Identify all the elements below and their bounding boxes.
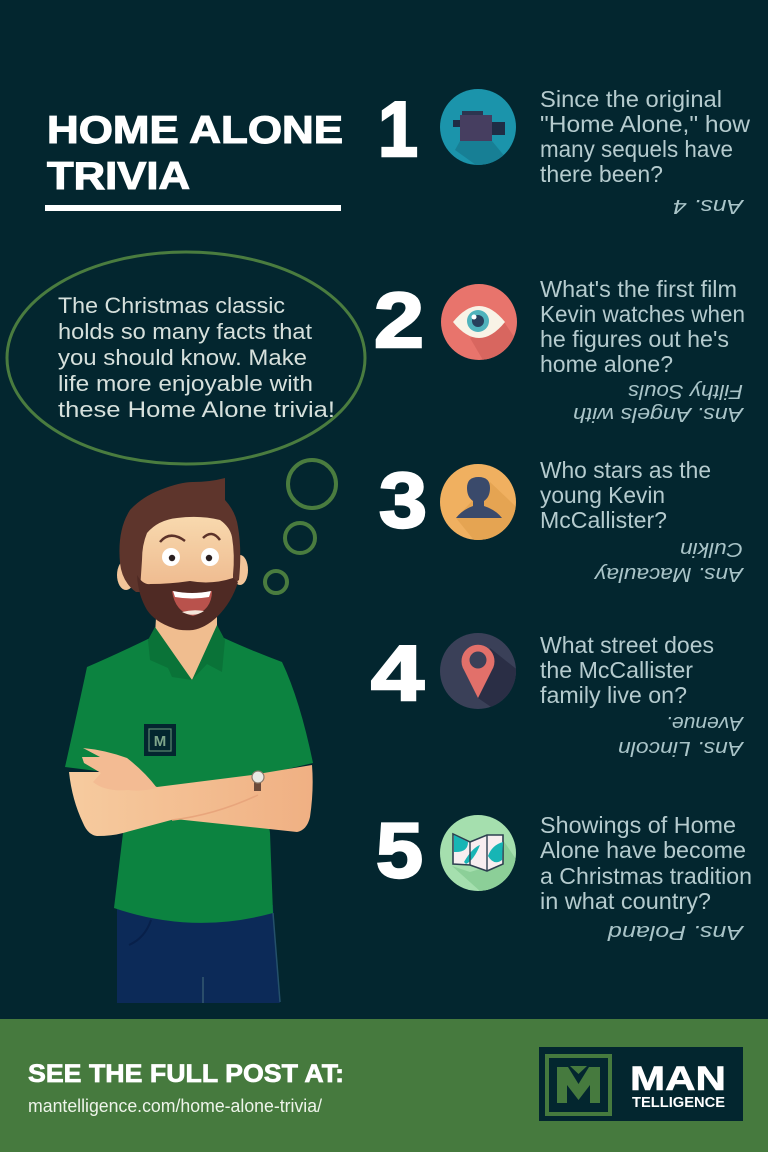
eyebrows [160, 534, 220, 542]
item 4 [371, 629, 744, 759]
footer url: mantelligence.com/home-alone-trivia/ [28, 1096, 322, 1116]
question 2: What's the first film [540, 276, 737, 302]
answer 5: Ans. Poland [607, 921, 744, 943]
face [140, 517, 234, 590]
footer [0, 1019, 768, 1152]
number 2: 2 [374, 276, 424, 364]
question 2: Kevin watches when [540, 301, 745, 327]
question 2: home alone? [540, 351, 673, 377]
icon: eye [441, 284, 517, 360]
crossed arms [69, 765, 313, 836]
question 1 [540, 86, 750, 187]
question 5: a Christmas tradition [540, 863, 752, 889]
number 5: 5 [376, 806, 423, 894]
number 1: 1 [378, 85, 418, 173]
answer 4 [618, 712, 744, 759]
arm crease [172, 795, 258, 820]
number 4: 4 [371, 629, 424, 717]
eyes [162, 548, 219, 566]
logo [539, 1047, 743, 1121]
thought bubble [7, 252, 365, 593]
question 4: family live on? [540, 682, 687, 708]
watch [252, 771, 264, 791]
question 2: he figures out he's [540, 326, 729, 352]
question 3 [540, 457, 711, 533]
hair [119, 478, 240, 592]
bubble text: these Home Alone trivia! [58, 397, 335, 422]
answer 3: Ans. Macaulay [594, 563, 744, 585]
question 4 [540, 632, 714, 708]
answer 2: Ans. Angels with [573, 403, 744, 425]
ears [117, 555, 248, 590]
icon: person [440, 464, 516, 540]
logo: TELLIGENCE [632, 1095, 725, 1111]
title [45, 109, 343, 211]
logo: MAN [630, 1060, 726, 1098]
answer 2: Filthy Souls [628, 380, 743, 402]
question 3: McCallister? [540, 507, 667, 533]
shirt badge [144, 724, 176, 756]
answer 3: Culkin [680, 538, 743, 560]
answer 4: Avenue. [666, 712, 744, 734]
question 1: Since the original [540, 86, 722, 112]
answer 3 [594, 538, 744, 585]
number 3: 3 [379, 456, 427, 544]
question 4: the McCallister [540, 657, 693, 683]
question 1: there been? [540, 161, 663, 187]
answer 2 [573, 380, 744, 425]
icon: map pin [440, 633, 516, 709]
bubble text: life more enjoyable with [58, 371, 313, 396]
item 1 [378, 85, 750, 217]
answer 4: Ans. Lincoln [618, 737, 744, 759]
title: HOME ALONE [47, 109, 343, 152]
bubble text: The Christmas classic [58, 293, 285, 318]
question 4: What street does [540, 632, 714, 658]
question 5: Showings of Home [540, 812, 736, 838]
shirt badge: M [154, 733, 166, 750]
beard [137, 575, 238, 630]
question 5: in what country? [540, 888, 711, 914]
question 5: Alone have become [540, 837, 746, 863]
question 5 [540, 812, 752, 914]
question 3: young Kevin [540, 482, 665, 508]
answer 1: Ans. 4 [673, 195, 744, 217]
trousers [117, 905, 280, 1003]
question 1: "Home Alone," how [540, 111, 750, 137]
icon: folded map [440, 815, 516, 891]
bubble text: holds so many facts that [58, 319, 312, 344]
icon: video camera [440, 89, 516, 165]
question 1: many sequels have [540, 136, 733, 162]
bubble text: you should know. Make [58, 345, 307, 370]
mouth [172, 591, 212, 616]
bubble text [58, 293, 335, 422]
item 3 [379, 456, 744, 585]
item 2 [374, 276, 745, 425]
hand [82, 748, 157, 791]
shirt [65, 638, 313, 923]
collar [148, 625, 225, 680]
title: TRIVIA [47, 155, 190, 198]
item 5 [376, 806, 752, 943]
footer heading: SEE THE FULL POST AT: [28, 1060, 344, 1088]
thought circles [265, 460, 336, 593]
question 2 [540, 276, 745, 377]
character [65, 478, 313, 1003]
question 3: Who stars as the [540, 457, 711, 483]
neck [155, 600, 217, 680]
